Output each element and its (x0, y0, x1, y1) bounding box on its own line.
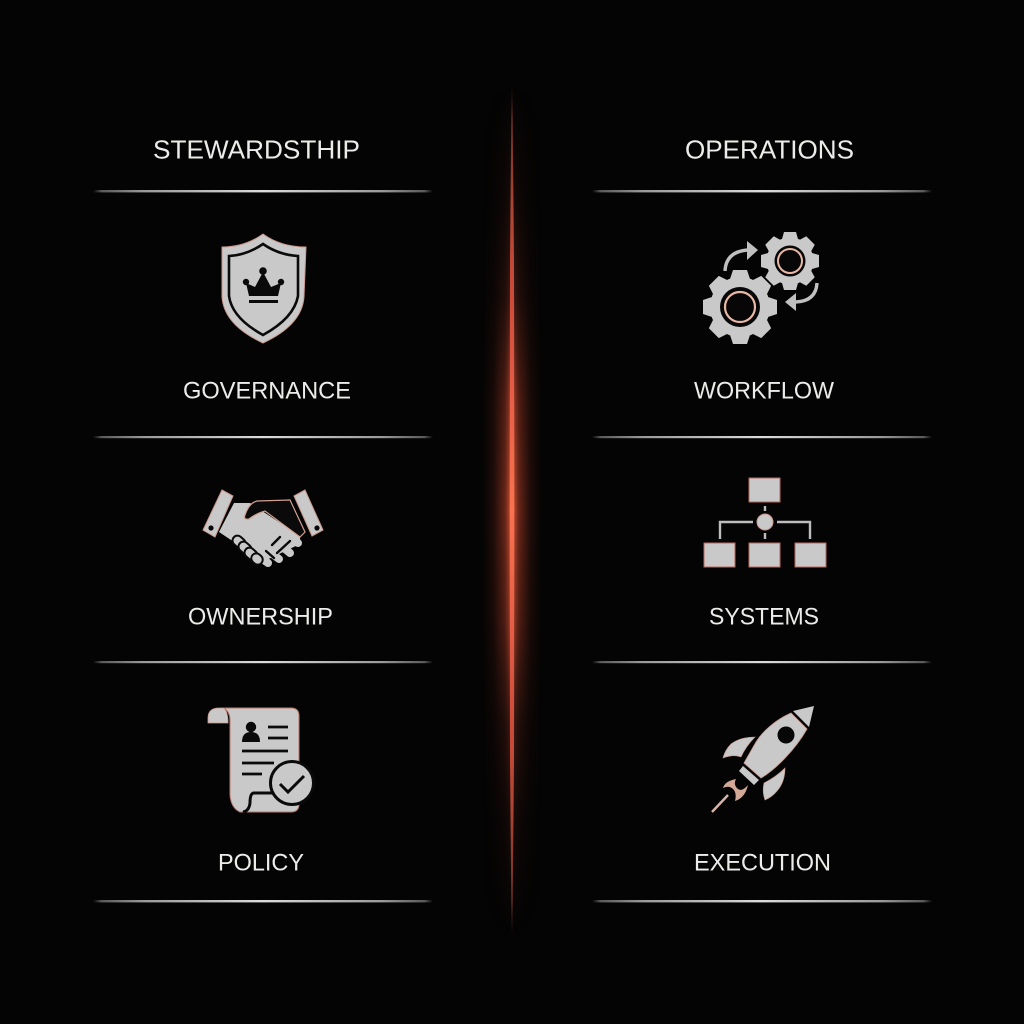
label: policy: POLICY (218, 850, 304, 876)
central glowing divider (486, 88, 538, 932)
icon: policy scroll with check (208, 708, 314, 812)
infographic canvas (94, 88, 931, 932)
rule under workflow (592, 436, 932, 438)
icon: shield with crown (222, 234, 306, 343)
label: workflow: WORKFLOW (694, 378, 834, 404)
heading: stewardship: STEWARDSTHIP (153, 134, 360, 164)
icon: rocket (712, 706, 814, 812)
rule under governance (93, 436, 433, 438)
label: governance: GOVERNANCE (183, 378, 351, 404)
label: execution: EXECUTION (694, 850, 831, 876)
label: systems: SYSTEMS (709, 604, 819, 630)
icon: handshake (203, 490, 323, 567)
label: ownership: OWNERSHIP (188, 604, 333, 630)
column: operations (592, 134, 932, 902)
header rule left (93, 190, 433, 192)
heading: operations: OPERATIONS (685, 134, 854, 164)
rule under systems (592, 661, 932, 663)
rule under ownership (93, 661, 433, 663)
header rule right (592, 190, 932, 192)
icon: gears with cycle arrows (703, 232, 819, 344)
rule under execution (592, 900, 932, 902)
column: stewardship (93, 134, 433, 902)
rule under policy (93, 900, 433, 902)
icon: systems hierarchy (704, 478, 826, 567)
